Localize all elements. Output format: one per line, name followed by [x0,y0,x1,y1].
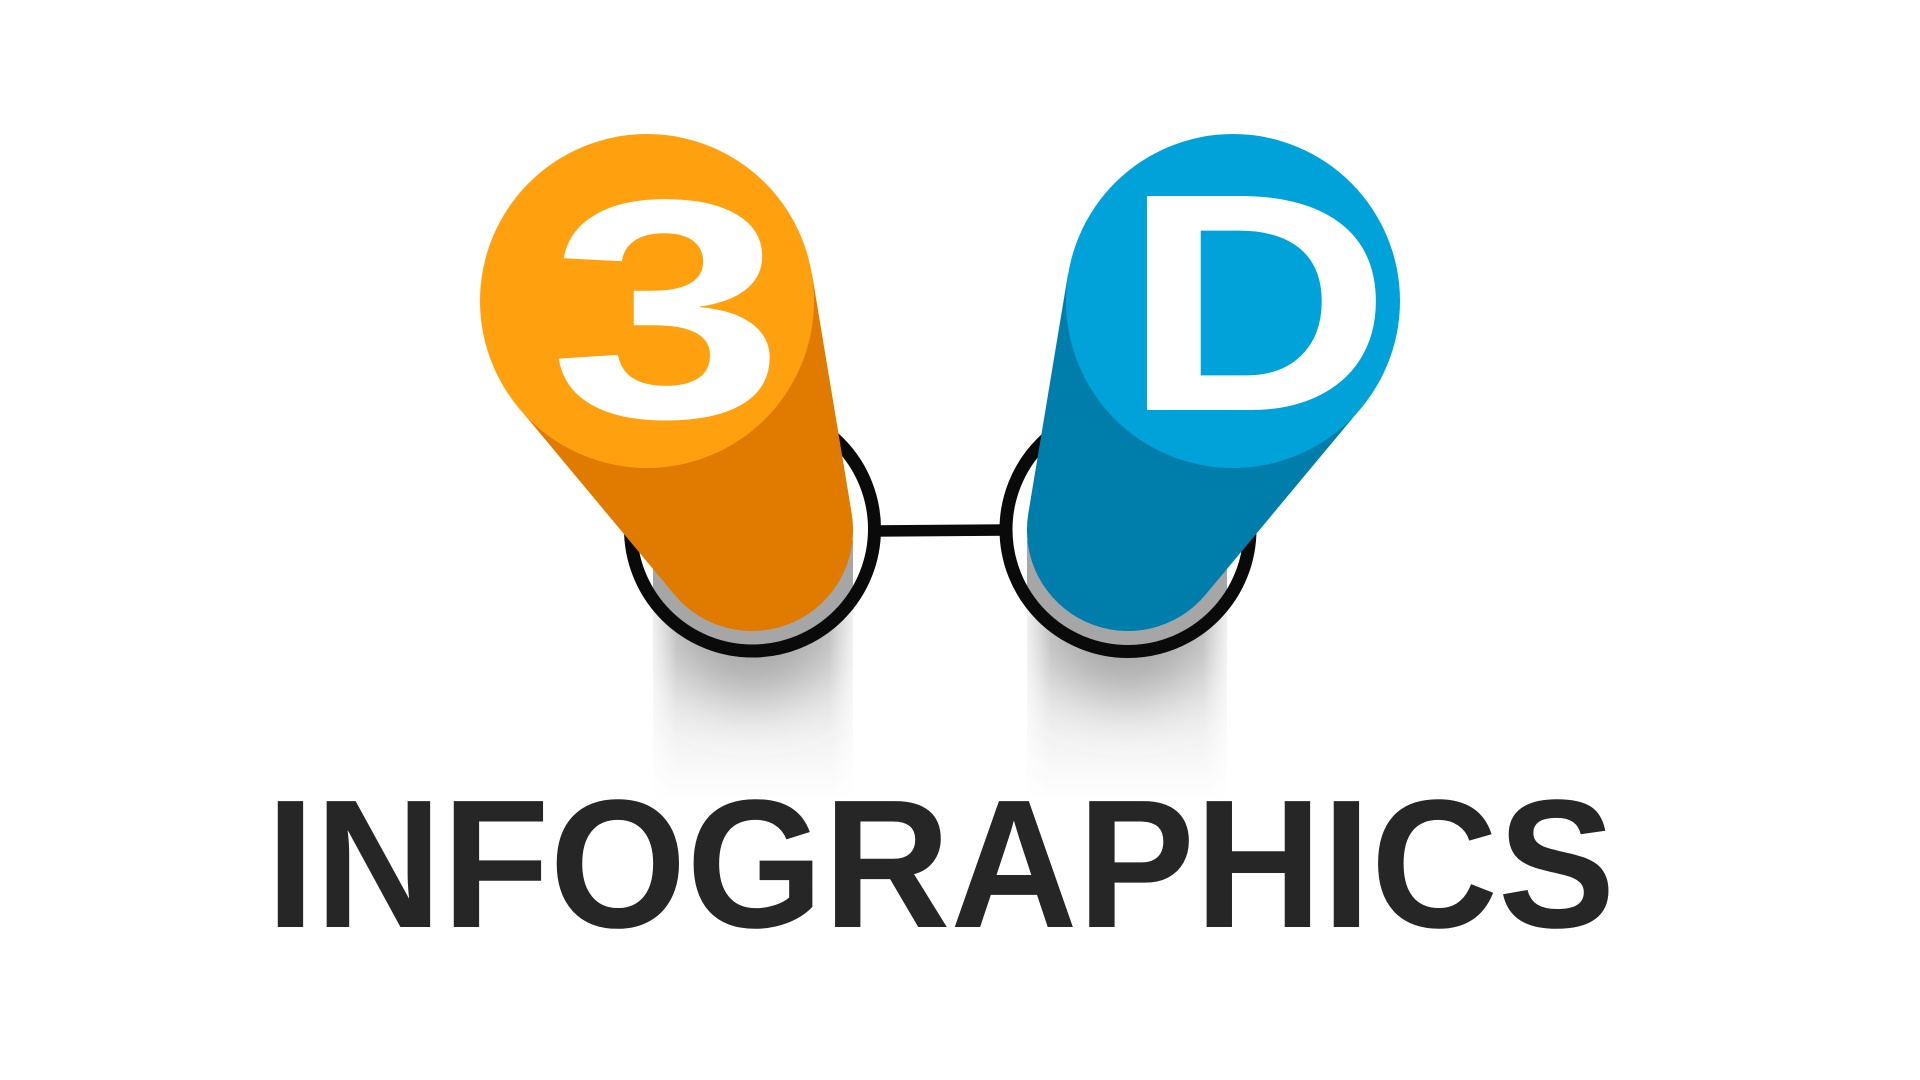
shadow: right cylinder [1027,540,1227,760]
cylinder: blue with letter D [1027,128,1400,631]
letter: D: D [1122,128,1392,476]
infographic canvas [278,134,1608,929]
cylinder body: blue [1027,274,1361,631]
ring: left [630,407,874,651]
title: INFOGRAPHICS [266,762,1615,967]
cylinder top: orange [480,134,814,468]
ring: right [1006,408,1250,652]
cylinder top: blue [1066,134,1400,468]
connector line between rings [875,530,1006,531]
cylinder: orange with digit 3 [480,134,853,631]
shadow: left cylinder [653,540,853,760]
cylinder body: orange [519,274,853,631]
letter: 3: 3 [549,135,785,483]
